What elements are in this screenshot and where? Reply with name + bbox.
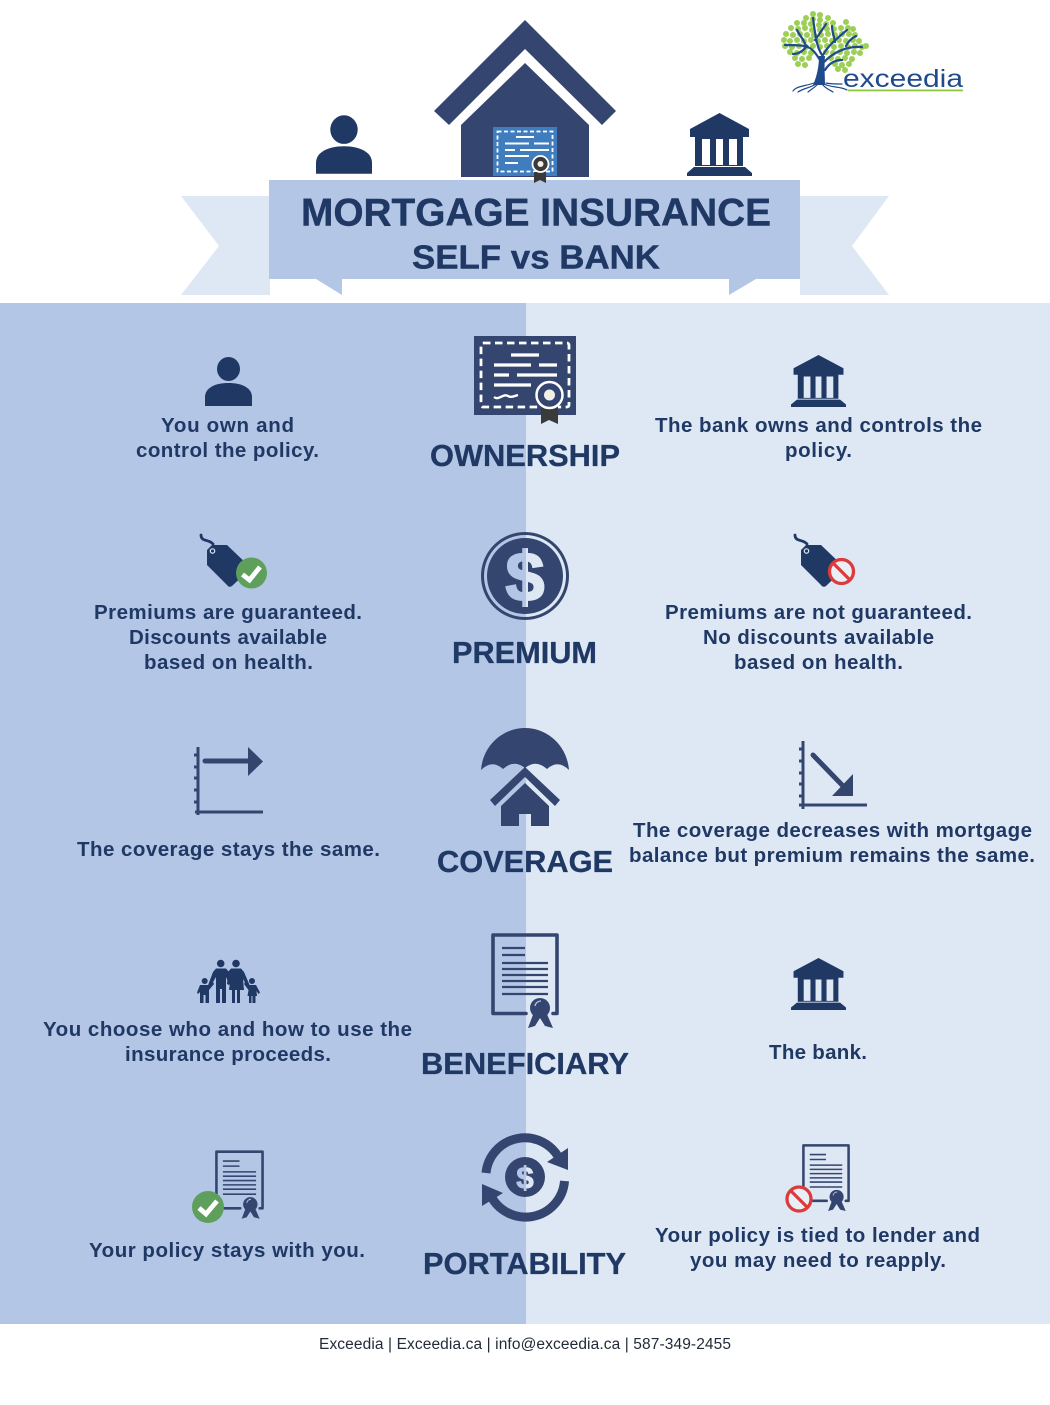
self coverage text: The coverage stays the same. xyxy=(77,838,380,861)
self premium text: Discounts available xyxy=(129,626,327,649)
icon: dollar coin xyxy=(482,534,568,618)
logo: exceedia tree xyxy=(784,14,963,93)
icon: self person xyxy=(205,357,252,406)
heading: beneficiary: BENEFICIARY xyxy=(421,1046,629,1081)
panel: self background xyxy=(0,303,526,1324)
icon: bank in header xyxy=(687,113,752,176)
self premium text xyxy=(94,601,362,674)
bank premium text: No discounts available xyxy=(703,626,934,649)
bank coverage text: balance but premium remains the same. xyxy=(629,844,1035,867)
row: portability xyxy=(89,1138,980,1281)
row: beneficiary xyxy=(43,935,867,1081)
self ownership text: control the policy. xyxy=(136,439,319,462)
bank premium text: based on health. xyxy=(734,651,903,674)
row: ownership xyxy=(136,336,982,473)
panel: bank background xyxy=(526,303,1050,1324)
self beneficiary text xyxy=(43,1018,412,1066)
icon: dollar with circular arrows xyxy=(482,1138,568,1217)
logo: exceedia tree: exceedia xyxy=(843,65,963,93)
bank coverage text xyxy=(629,819,1035,867)
self portability text: Your policy stays with you. xyxy=(89,1239,365,1262)
icon: house with policy certificate xyxy=(434,20,616,183)
bank portability text: Your policy is tied to lender and xyxy=(655,1224,980,1247)
icon: document with check xyxy=(192,1152,263,1223)
self ownership text: You own and xyxy=(161,414,294,437)
bank premium text: Premiums are not guaranteed. xyxy=(665,601,972,624)
title banner xyxy=(181,180,889,295)
bank ownership text: policy. xyxy=(785,439,852,462)
icon: policy document xyxy=(493,935,557,1028)
self premium text: Premiums are guaranteed. xyxy=(94,601,362,624)
bank portability text: you may need to reapply. xyxy=(690,1249,946,1272)
footer contact line: Exceedia | Exceedia.ca | info@exceedia.ca | 587-349-2455 xyxy=(319,1336,731,1353)
heading: coverage: COVERAGE xyxy=(437,844,613,879)
icon: document with prohibition xyxy=(787,1145,849,1211)
self ownership text xyxy=(136,414,319,462)
title text: MORTGAGE INSURANCE xyxy=(301,192,771,234)
icon: family xyxy=(197,960,260,1003)
row: premium xyxy=(94,534,972,674)
heading: portability: PORTABILITY xyxy=(423,1246,626,1281)
icon: umbrella over house xyxy=(481,728,569,826)
icon: flat coverage chart xyxy=(194,747,263,815)
icon: ownership certificate xyxy=(474,336,576,424)
icon: dollar with circular arrows: $ xyxy=(516,1160,534,1195)
bank ownership text: The bank owns and controls the xyxy=(655,414,982,437)
bank beneficiary text: The bank. xyxy=(769,1041,867,1064)
icon: bank xyxy=(791,355,846,407)
heading: ownership: OWNERSHIP xyxy=(430,438,620,473)
bank premium text xyxy=(665,601,972,674)
bank portability text xyxy=(655,1224,980,1272)
self beneficiary text: You choose who and how to use the xyxy=(43,1018,412,1041)
icon: price tag with prohibition xyxy=(795,535,854,587)
row: coverage xyxy=(77,728,1035,879)
bank coverage text: The coverage decreases with mortgage xyxy=(633,819,1032,842)
self premium text: based on health. xyxy=(144,651,313,674)
icon: bank xyxy=(791,958,846,1010)
heading: premium: PREMIUM xyxy=(452,635,597,670)
bank ownership text xyxy=(655,414,982,462)
self beneficiary text: insurance proceeds. xyxy=(125,1043,331,1066)
icon: price tag with check xyxy=(201,535,267,588)
icon: decreasing coverage chart xyxy=(799,741,867,809)
subtitle text: SELF vs BANK xyxy=(412,238,660,276)
icon: person in header xyxy=(316,115,372,174)
icon: dollar coin: $ xyxy=(506,538,544,616)
